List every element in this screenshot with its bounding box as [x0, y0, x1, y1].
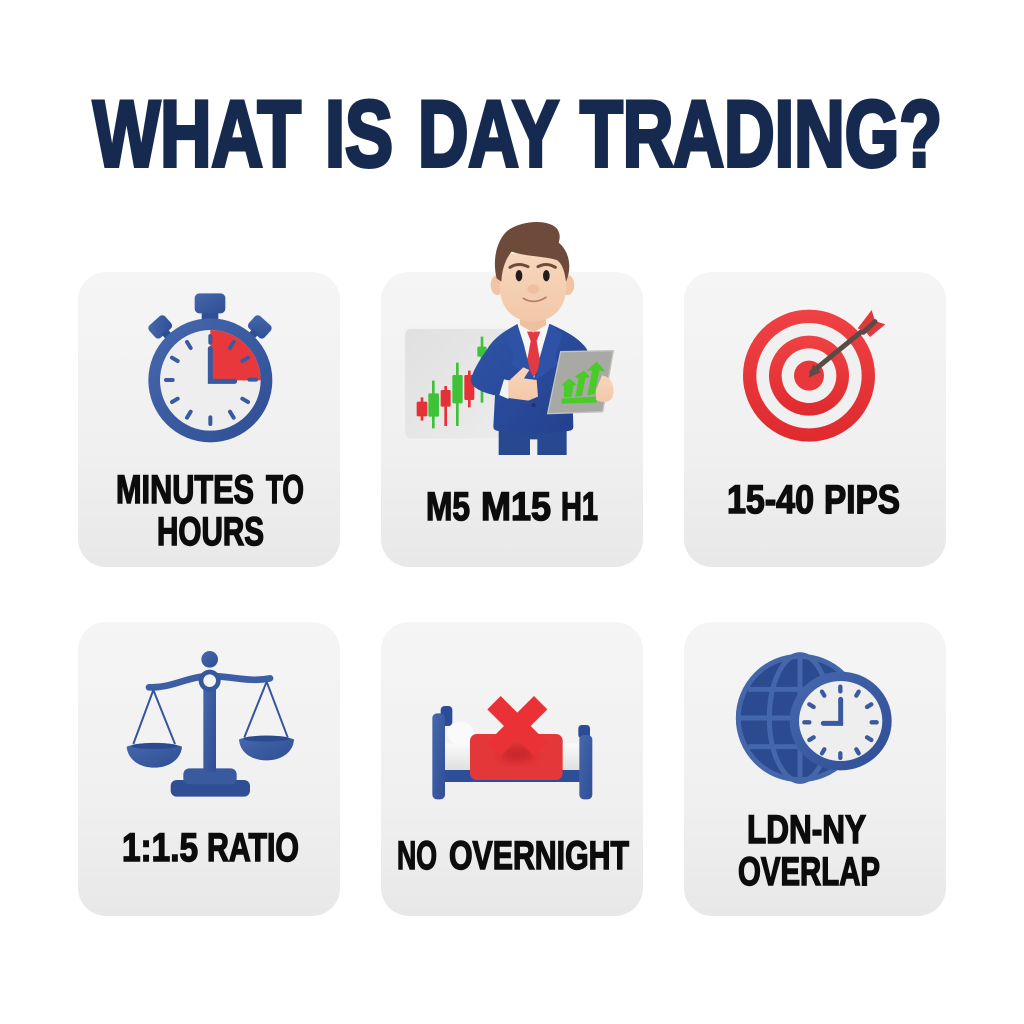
- tie: [526, 332, 541, 377]
- chart board: [404, 328, 511, 439]
- icon: bed with red cross: [432, 696, 592, 799]
- face: [510, 264, 555, 301]
- label: [738, 808, 880, 894]
- icon: target with arrow: [743, 310, 885, 442]
- title: IS: [325, 81, 393, 186]
- label: RATIO: [207, 826, 299, 870]
- label: OVERNIGHT: [449, 834, 629, 878]
- ears: [491, 275, 504, 295]
- title: [93, 81, 942, 186]
- label: TO: [266, 468, 304, 512]
- label: H1: [561, 485, 598, 529]
- label: OVERLAP: [738, 850, 880, 894]
- label: [116, 468, 304, 554]
- title: WHAT: [93, 81, 301, 186]
- icon: balance scale: [127, 651, 294, 797]
- tablet chart arrows: [562, 362, 605, 404]
- cuff and hand: [499, 379, 511, 399]
- label: M5: [426, 485, 470, 529]
- label: 1:1.5: [122, 826, 198, 870]
- label: [426, 485, 598, 529]
- icon: globe and clock: [736, 654, 892, 782]
- head: [500, 253, 566, 322]
- label: MINUTES: [116, 468, 254, 512]
- tablet: [548, 351, 613, 414]
- trousers: [499, 423, 567, 455]
- shirt: [517, 324, 549, 378]
- hair: [495, 222, 569, 282]
- title: DAY: [418, 81, 559, 186]
- label: HOURS: [157, 510, 264, 554]
- label: LDN-NY: [747, 808, 866, 852]
- right hand: [596, 375, 614, 402]
- panel: timeframes: [381, 222, 643, 567]
- label: NO: [397, 834, 437, 878]
- jacket and arm: [471, 324, 587, 434]
- label: [397, 834, 629, 878]
- panel: ratio: [78, 622, 340, 916]
- label: PIPS: [824, 478, 900, 522]
- label: [727, 478, 900, 522]
- label: 15-40: [727, 478, 814, 522]
- icon: stopwatch: [147, 293, 273, 442]
- icon: trader with chart and tablet: [404, 222, 614, 455]
- panel: no overnight: [381, 622, 643, 916]
- neck: [520, 313, 546, 333]
- panel: minutes to hours: [78, 272, 340, 567]
- label: [122, 826, 299, 870]
- lapels: [505, 324, 563, 381]
- panel: pips target: [684, 272, 946, 567]
- panel: London-New York overlap: [684, 622, 946, 916]
- button: [532, 403, 536, 407]
- label: M15: [481, 485, 551, 529]
